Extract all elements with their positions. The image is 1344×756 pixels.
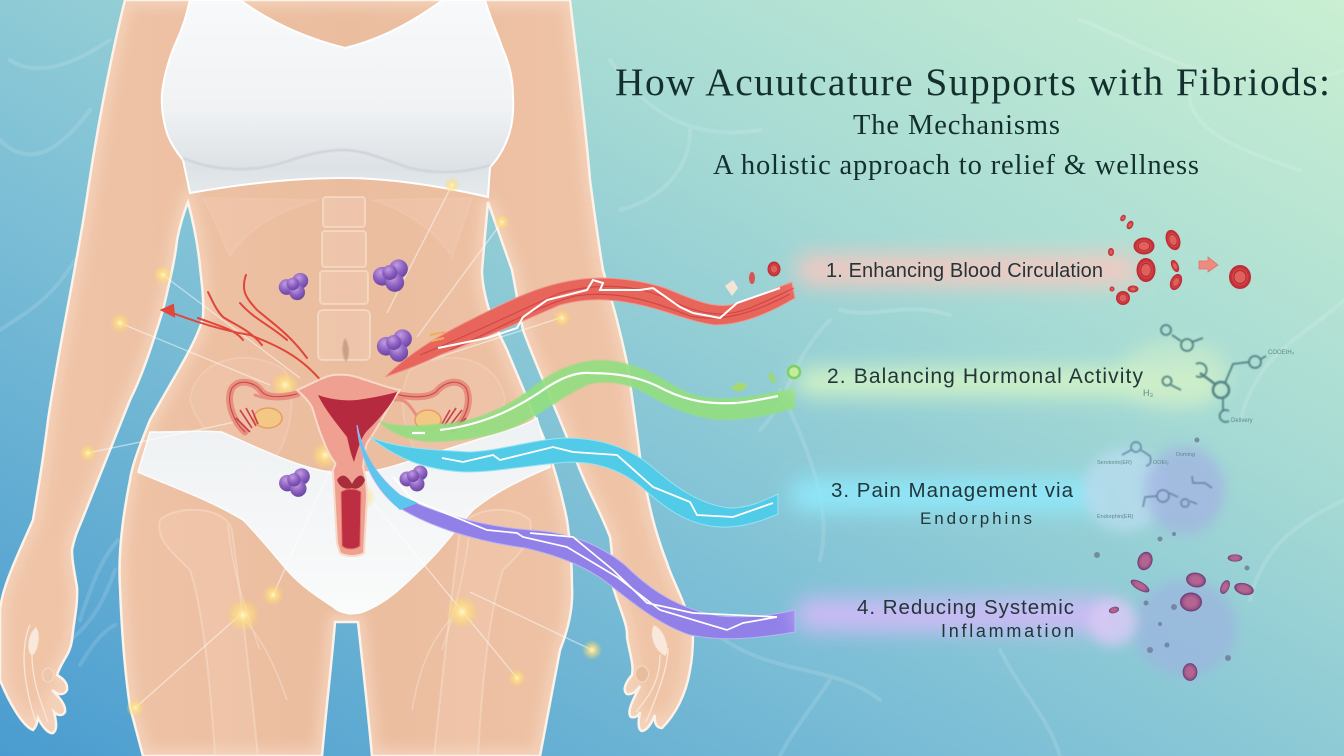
white underwear [138,418,550,614]
title: How Acuutcature Supports with Fibriods: [615,60,1330,104]
orange flecks [430,332,445,341]
uterus and fallopian tubes [230,375,468,556]
glow band: hormonal activity [795,368,1215,396]
ribbon: blue endorphin flow [370,437,778,527]
red arteries with arrow [162,275,322,382]
uterine cavity [318,392,397,462]
molecule labels: endorphins: OOEt₂ [1153,460,1169,466]
label 4: Inflammation [941,621,1074,641]
cloud: hormones [1120,340,1230,410]
bra cup shading [183,150,490,172]
translucent skeleton: spine, ribs, pelvis and femurs [159,197,531,756]
glow band: blood circulation [795,254,1140,286]
label 4: 4. Reducing Systemic [857,596,1074,619]
molecule diagram: endorphins [1122,442,1212,507]
molecule labels: hormones [1143,350,1295,424]
right thumbnail [636,666,648,682]
cloud: endorphins left [1083,448,1167,532]
right fallopian tube [395,382,468,430]
right hand details [636,626,668,722]
tagline: A holistic approach to relief & wellness [713,150,1199,181]
molecule labels: hormones: H₃ [1143,388,1153,398]
label 2: 2. Balancing Hormonal Activity [827,365,1144,388]
left ovary [236,408,282,432]
glow points [79,177,602,717]
molecule labels: hormones: COOEtH₃ [1268,350,1295,356]
red blood cells [768,214,1251,305]
molecule labels: endorphins [1097,452,1195,520]
ribbon: green hormone flow [378,360,795,442]
molecule diagram: hormones [1161,325,1266,422]
right ovary [415,408,466,432]
hormone particles [730,366,800,392]
pink inflammatory cells [1108,550,1255,680]
label 3: Endorphins [920,509,1032,528]
cloud: inflammation [1133,580,1237,676]
subtitle: The Mechanisms [853,110,1060,141]
molecule labels: endorphins: Doming [1176,452,1195,458]
glow band: pain management [790,478,1100,512]
inflammation particles [1094,438,1250,661]
debris near red ribbon [725,272,755,296]
acupuncture needles [88,185,592,708]
cloud: endorphins right [1145,446,1225,534]
blue end of purple ribbon [357,425,418,510]
body silhouette: arms, torso, legs, hands [0,0,693,756]
label 1: 1. Enhancing Blood Circulation [826,260,1103,282]
glow band: inflammation [795,598,1115,632]
label 3 [831,479,1074,528]
ribbon: red blood flow [385,278,795,377]
molecule labels: endorphins: Endorphin(ER) [1097,514,1134,520]
cervix folds [337,476,365,489]
cloud: inflammation core [1089,598,1137,646]
label 3: 3. Pain Management via [831,479,1074,502]
purple fibroid clusters [279,259,428,497]
left hand details [24,625,48,722]
label 4 [857,596,1074,641]
molecule labels: endorphins: Serotonin(ER) [1097,460,1132,466]
arrow between blood cells [1199,257,1218,272]
ribbon: purple inflammation flow [357,425,795,639]
white bra [162,0,513,197]
left fallopian tube [230,382,297,432]
molecule labels: hormones: Delivery [1231,418,1253,424]
cervical canal [341,489,361,549]
left thumbnail [42,668,54,682]
navel [342,338,349,362]
uterus body [297,375,400,556]
